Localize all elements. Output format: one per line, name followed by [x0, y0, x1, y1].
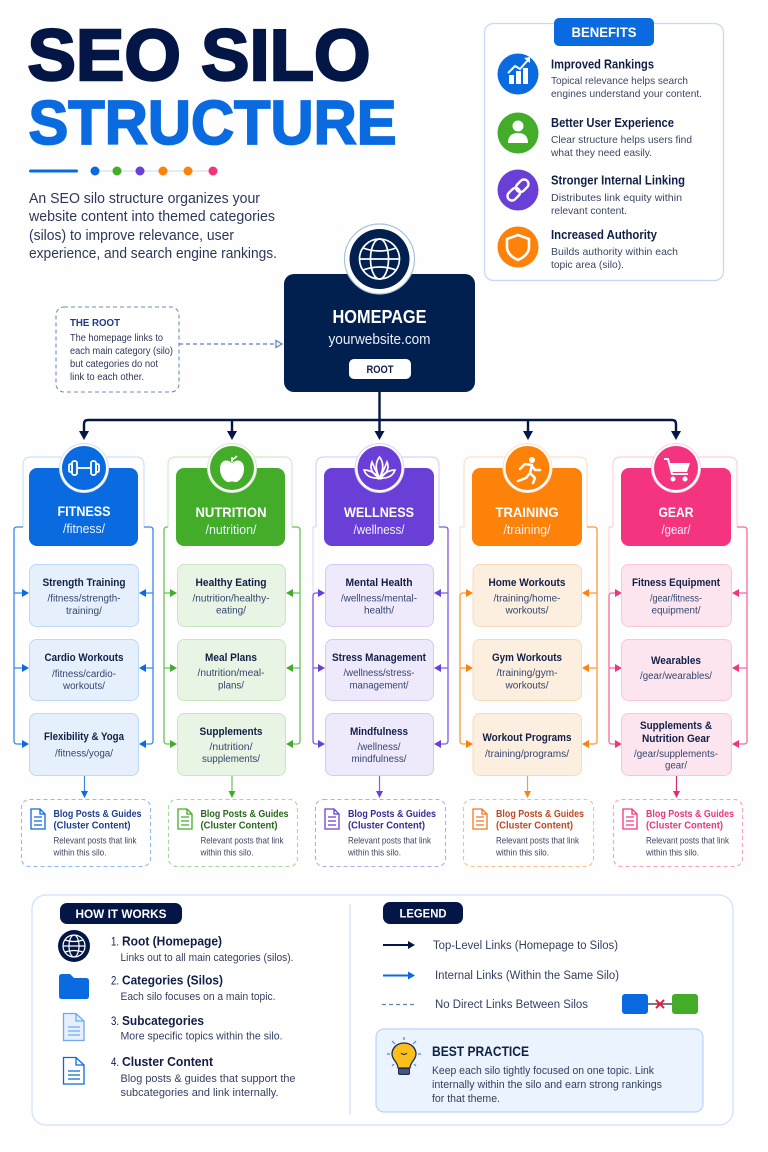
subcategory: supplements and nutrition gear: [622, 714, 732, 776]
benefit: increased authority: Builds authority within each: [551, 246, 678, 258]
benefit: increased authority: topic area (silo).: [551, 259, 624, 271]
title divider with coloured dots: [29, 166, 218, 176]
benefit: better user experience: [498, 112, 692, 159]
subcategory: healthy eating: /nutrition/healthy-: [192, 594, 270, 604]
nutrition category: /nutrition/: [206, 523, 257, 537]
fitness category: FITNESS: [58, 503, 110, 519]
panel: benefits: [484, 18, 724, 280]
benefit: improved rankings: [498, 54, 702, 100]
nutrition cluster content: Relevant posts that link: [200, 836, 284, 846]
wellness category: /wellness/: [354, 523, 405, 537]
subcategory: meal plans: /nutrition/meal-: [198, 668, 264, 679]
benefits heading: [554, 18, 654, 46]
subcategory: supplements and nutrition gear: Nutrition Gear: [642, 733, 711, 745]
icon: light bulb: [387, 1037, 421, 1074]
how it works heading: [60, 903, 182, 924]
nutrition cluster content: Blog Posts & Guides: [200, 809, 289, 820]
subcategory: supplements and nutrition gear: gear/: [665, 760, 687, 772]
step: subcategories: Subcategories: [122, 1013, 204, 1028]
training cluster content: [464, 800, 594, 866]
subcategory: stress management: /wellness/stress-: [344, 668, 414, 679]
legend heading: [383, 902, 463, 924]
fitness category: [29, 443, 138, 546]
title: SEO SILO: [28, 16, 370, 96]
benefit: increased authority: [498, 226, 678, 271]
gear cluster content: (Cluster Content): [646, 820, 723, 832]
internal link connectors: [14, 527, 153, 748]
subcategory: fitness equipment: [622, 564, 732, 626]
subcategory: workout programs: /training/programs/: [485, 749, 569, 760]
subcategory: meal plans: Meal Plans: [205, 652, 257, 664]
benefit: improved rankings: Topical relevance helps search: [551, 75, 688, 87]
subcategory: cardio workouts: Cardio Workouts: [44, 652, 124, 664]
how it works heading: HOW IT WORKS: [76, 907, 166, 921]
benefit: stronger internal linking: [498, 170, 685, 217]
panel: gear silo: [609, 443, 747, 866]
arrow: to fitness cluster: [81, 776, 88, 798]
fitness cluster content: [22, 800, 150, 866]
subcategory: stress management: Stress Management: [332, 652, 426, 664]
subcategory: healthy eating: Healthy Eating: [196, 577, 266, 589]
training cluster content: (Cluster Content): [496, 820, 573, 832]
homepage node: HOMEPAGE: [332, 306, 426, 327]
legend: top-level links: Top-Level Links (Homepage to Silos): [433, 940, 618, 952]
step: cluster content: Blog posts & guides that support the: [120, 1073, 296, 1085]
callout: best practice: BEST PRACTICE: [432, 1043, 529, 1059]
benefit: improved rankings: Improved Rankings: [551, 58, 654, 72]
subcategory: wearables: [622, 640, 732, 700]
callout: best practice: internally within the silo and earn strong rankings: [432, 1079, 662, 1091]
subcategory: gym workouts: Gym Workouts: [492, 652, 562, 664]
subcategory: mental health: Mental Health: [346, 577, 413, 589]
arrow: to training cluster: [524, 776, 531, 798]
intro paragraph: [28, 191, 277, 262]
fitness category: /fitness/: [63, 522, 106, 536]
internal link connectors: [313, 527, 448, 748]
subcategory: gym workouts: workouts/: [504, 680, 549, 692]
subcategory: mindfulness: Mindfulness: [350, 726, 408, 738]
subcategory: mindfulness: [326, 714, 434, 776]
intro paragraph: experience, and search engine rankings.: [29, 246, 277, 262]
subcategory: wearables: /gear/wearables/: [640, 671, 712, 682]
icon: globe: [344, 224, 414, 294]
title: [28, 16, 396, 158]
nutrition category: [176, 443, 285, 546]
arrow: to wellness cluster: [376, 776, 383, 798]
subcategory: strength training: [30, 564, 138, 626]
wellness category: WELLNESS: [344, 504, 414, 520]
benefits heading: BENEFITS: [572, 25, 636, 40]
wellness cluster content: Blog Posts & Guides: [348, 809, 436, 820]
title: STRUCTURE: [28, 89, 396, 158]
subcategory: mental health: [326, 564, 434, 626]
step: categories: 2.: [111, 976, 119, 988]
subcategory: strength training: Strength Training: [42, 577, 126, 589]
subcategory: healthy eating: eating/: [216, 606, 246, 616]
subcategory: workout programs: Workout Programs: [482, 732, 572, 744]
subcategory: strength training: training/: [66, 606, 102, 617]
fitness cluster content: Relevant posts that link: [54, 836, 137, 846]
step: root homepage: Links out to all main categories (silos).: [120, 952, 294, 964]
root badge: ROOT: [366, 364, 394, 376]
training cluster content: within this silo.: [495, 848, 549, 858]
benefit: stronger internal linking: Distributes link equity within: [551, 192, 682, 204]
subcategory: stress management: [326, 640, 434, 700]
subcategory: flexibility and yoga: Flexibility & Yoga: [44, 731, 125, 743]
arrow: to gear cluster: [673, 776, 680, 798]
internal link connectors: [460, 527, 597, 748]
benefit: stronger internal linking: relevant content.: [551, 205, 627, 217]
fitness cluster content: (Cluster Content): [54, 820, 130, 832]
intro paragraph: website content into themed categories: [28, 209, 275, 225]
wellness cluster content: Relevant posts that link: [348, 836, 431, 846]
panel: how it works and legend: [32, 895, 733, 1125]
subcategory: gym workouts: /training/gym-: [496, 668, 558, 679]
subcategory: meal plans: [178, 640, 286, 700]
training cluster content: Blog Posts & Guides: [496, 809, 584, 820]
subcategory: strength training: /fitness/strength-: [48, 594, 120, 604]
nutrition cluster content: within this silo.: [200, 848, 254, 858]
homepage node: yourwebsite.com: [328, 332, 430, 348]
panel: fitness silo: [14, 443, 153, 866]
gear cluster content: Relevant posts that link: [646, 836, 729, 846]
arrow: root callout to homepage: [179, 340, 282, 348]
nutrition cluster content: (Cluster Content): [200, 820, 278, 832]
gear category: /gear/: [662, 523, 691, 537]
subcategory: fitness equipment: equipment/: [652, 606, 701, 616]
internal link connectors: [609, 527, 747, 748]
step: categories: Categories (Silos): [122, 972, 223, 988]
step: subcategories: [64, 1013, 282, 1042]
step: categories: Each silo focuses on a main topic.: [120, 991, 276, 1003]
subcategory: fitness equipment: /gear/fitness-: [650, 594, 702, 604]
subcategory: stress management: management/: [350, 680, 409, 692]
subcategory: supplements: Supplements: [200, 726, 262, 738]
panel: nutrition silo: [164, 443, 300, 866]
training category: [472, 443, 582, 546]
step: categories: [59, 972, 276, 1003]
legend heading: LEGEND: [400, 906, 447, 920]
subcategory: supplements: [178, 714, 286, 776]
training cluster content: Relevant posts that link: [496, 836, 579, 846]
subcategory: mindfulness: /wellness/: [358, 742, 401, 753]
callout: the root: link to each other.: [70, 372, 144, 383]
callout: the root: The homepage links to: [70, 333, 163, 344]
subcategory: home workouts: Home Workouts: [488, 577, 566, 589]
step: root homepage: [58, 930, 294, 964]
legend: no direct links: No Direct Links Between Silos: [435, 999, 588, 1011]
callout: best practice: for that theme.: [432, 1093, 500, 1105]
homepage node: [284, 224, 475, 392]
subcategory: meal plans: plans/: [218, 680, 244, 692]
fitness cluster content: within this silo.: [53, 848, 106, 858]
fitness cluster content: Blog Posts & Guides: [54, 809, 142, 820]
subcategory: supplements and nutrition gear: /gear/supplements-: [634, 749, 718, 760]
subcategory: flexibility and yoga: /fitness/yoga/: [55, 748, 113, 760]
benefit: increased authority: Increased Authority: [551, 228, 657, 242]
panel: wellness silo: [313, 443, 448, 866]
callout: the root: THE ROOT: [70, 317, 121, 329]
intro paragraph: (silos) to improve relevance, user: [29, 228, 234, 244]
subcategory: wearables: Wearables: [651, 655, 701, 667]
arrows: top-level links from homepage to silos: [79, 392, 681, 440]
step: cluster content: 4.: [111, 1057, 119, 1069]
subcategory: healthy eating: [178, 564, 286, 626]
gear cluster content: [614, 800, 742, 866]
benefit: better user experience: Better User Experience: [551, 116, 674, 130]
wellness cluster content: within this silo.: [347, 848, 401, 858]
benefit: better user experience: Clear structure helps users find: [551, 134, 692, 146]
subcategory: cardio workouts: [30, 640, 138, 700]
step: subcategories: 3.: [111, 1016, 119, 1028]
gear cluster content: Blog Posts & Guides: [646, 809, 734, 820]
intro paragraph: An SEO silo structure organizes your: [29, 191, 260, 207]
wellness category: [324, 443, 434, 546]
subcategory: gym workouts: [473, 640, 582, 700]
subcategory: flexibility and yoga: [30, 714, 138, 776]
subcategory: home workouts: [473, 564, 582, 626]
subcategory: mental health: /wellness/mental-: [341, 594, 417, 604]
subcategory: workout programs: [473, 714, 582, 776]
callout: the root: each main category (silo): [70, 346, 173, 357]
callout: best practice: Keep each silo tightly focused on one topic. Link: [432, 1065, 654, 1077]
subcategory: mindfulness: mindfulness/: [352, 754, 407, 765]
benefit: improved rankings: engines understand your content.: [551, 88, 702, 100]
subcategory: cardio workouts: /fitness/cardio-: [52, 669, 116, 680]
legend: no direct links: [382, 994, 698, 1014]
callout: the root: [56, 307, 179, 392]
subcategory: mental health: health/: [364, 606, 394, 616]
step: cluster content: Cluster Content: [122, 1054, 214, 1069]
wellness cluster content: (Cluster Content): [348, 820, 425, 832]
step: subcategories: More specific topics within the silo.: [120, 1030, 282, 1042]
panel: training silo: [460, 443, 597, 866]
subcategory: supplements: /nutrition/: [210, 742, 253, 753]
subcategory: supplements and nutrition gear: Supplements &: [640, 720, 712, 732]
callout: best practice: [376, 1029, 703, 1112]
gear cluster content: within this silo.: [645, 848, 699, 858]
subcategory: cardio workouts: workouts/: [62, 681, 105, 692]
nutrition cluster content: [168, 800, 298, 866]
benefit: stronger internal linking: Stronger Internal Linking: [551, 174, 685, 188]
step: cluster content: subcategories and link internally.: [120, 1087, 278, 1099]
training category: /training/: [504, 523, 551, 537]
step: root homepage: 1.: [111, 936, 119, 948]
gear category: [621, 443, 731, 546]
legend: internal links: Internal Links (Within the Same Silo): [435, 970, 619, 982]
callout: the root: but categories do not: [70, 359, 158, 370]
subcategory: supplements: supplements/: [202, 754, 260, 765]
subcategory: home workouts: /training/home-: [494, 594, 560, 604]
arrow: to nutrition cluster: [228, 776, 236, 798]
step: cluster content: [64, 1054, 296, 1099]
benefit: better user experience: what they need easily.: [550, 147, 652, 159]
internal link connectors: [164, 527, 300, 748]
gear category: GEAR: [658, 504, 694, 520]
subcategory: fitness equipment: Fitness Equipment: [632, 577, 720, 589]
training category: TRAINING: [496, 504, 559, 520]
step: root homepage: Root (Homepage): [122, 934, 222, 948]
subcategory: home workouts: workouts/: [504, 606, 549, 616]
root badge: [349, 359, 411, 379]
nutrition category: NUTRITION: [196, 504, 266, 520]
wellness cluster content: [316, 800, 446, 866]
